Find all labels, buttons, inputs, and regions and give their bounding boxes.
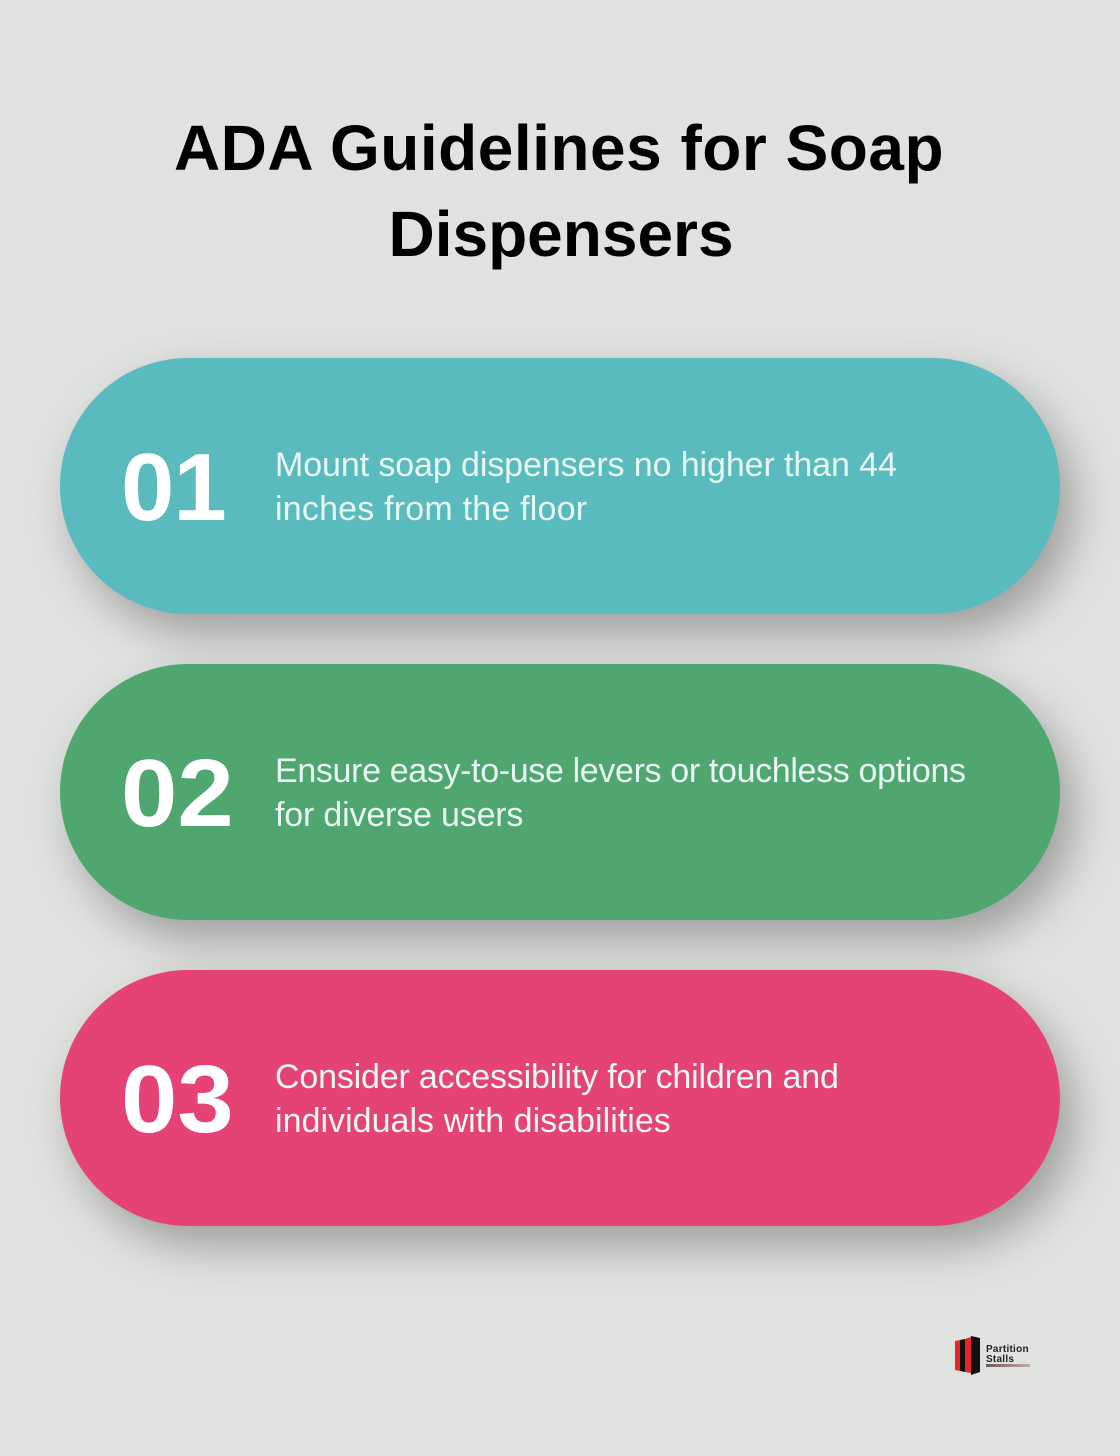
number 02: 02 [121, 740, 234, 847]
panel: step 01 [60, 358, 1060, 614]
logo wordmark [986, 1344, 1029, 1364]
logo: Partition Stalls [955, 1336, 1030, 1375]
title [174, 112, 944, 270]
icon: partition panels [955, 1336, 980, 1375]
text: step 02: for diverse users [275, 796, 523, 834]
title: Dispensers [388, 198, 734, 270]
panel: step 03 [60, 970, 1060, 1226]
title: ADA Guidelines for Soap [174, 112, 944, 184]
panel: step 02 [60, 664, 1060, 920]
logo wordmark: Partition [986, 1344, 1029, 1355]
text: step 02 [275, 752, 966, 834]
number 03: 03 [121, 1046, 234, 1153]
logo tagline strip [986, 1364, 1030, 1367]
text: step 01: Mount soap dispensers no higher than 44 [275, 446, 897, 484]
text: step 02: Ensure easy-to-use levers or touchless options [275, 752, 966, 790]
logo wordmark: Stalls [986, 1354, 1014, 1364]
text: step 03: Consider accessibility for children and [275, 1058, 839, 1096]
text: step 03: individuals with disabilities [275, 1102, 671, 1140]
text: step 03 [275, 1058, 839, 1140]
number 01: 01 [121, 434, 226, 541]
text: step 01: inches from the floor [275, 490, 587, 528]
text: step 01 [275, 446, 897, 528]
